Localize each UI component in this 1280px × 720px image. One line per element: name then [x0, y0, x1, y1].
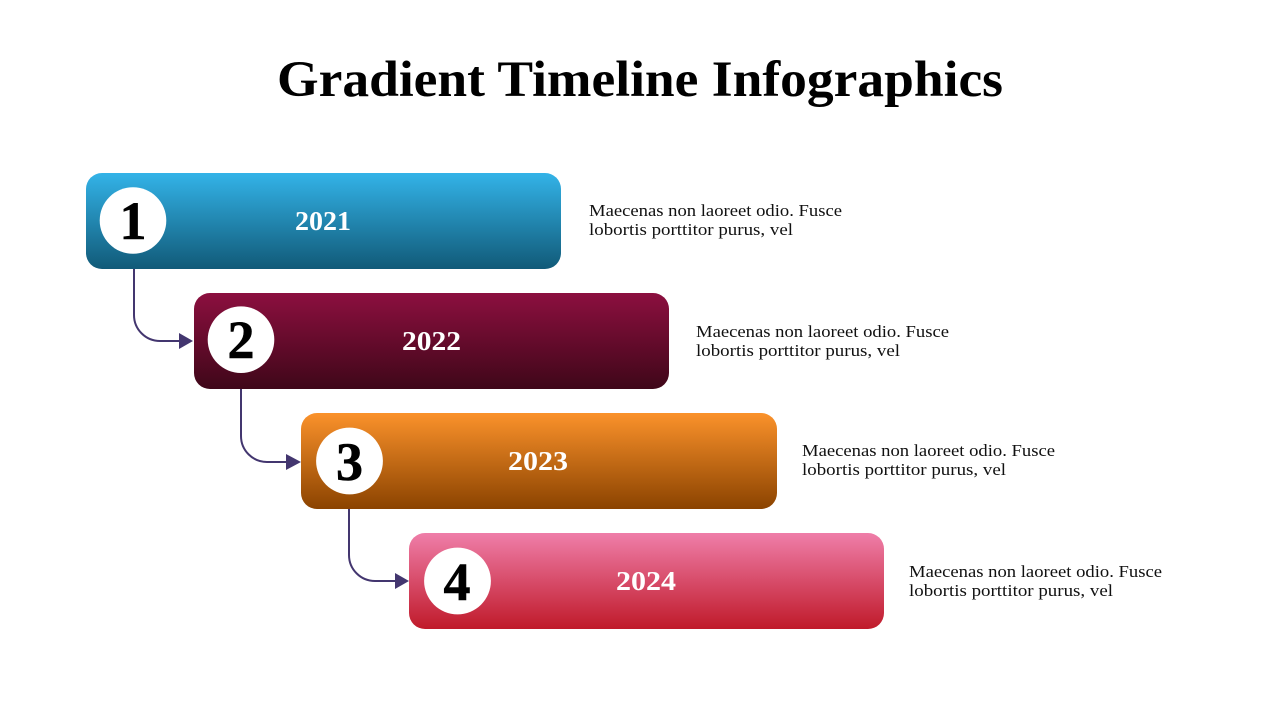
description: 2023: Maecenas non laoreet odio. Fusce [802, 441, 1055, 460]
year label: 2022: 2022 [402, 326, 461, 356]
arrow: step 2 to step 3 [241, 389, 301, 470]
arrow: step 1 to step 2 [134, 269, 193, 349]
bar: 2022 [194, 293, 669, 389]
year label: 2021: 2021 [295, 206, 351, 236]
year label: 2024: 2024 [616, 566, 676, 596]
badge: number 3 [316, 428, 383, 494]
description: 2021: lobortis porttitor purus, vel [589, 220, 793, 239]
title: Gradient Timeline Infographics [277, 52, 1003, 108]
year label: 2023: 2023 [508, 446, 568, 476]
panel: 2022 step [194, 293, 669, 389]
panel: 2023 step [301, 413, 777, 509]
description: 2022: Maecenas non laoreet odio. Fusce [696, 322, 949, 341]
description: 2024: lobortis porttitor purus, vel [909, 581, 1113, 600]
panel: 2021 step [86, 173, 561, 269]
badge: number 1 [100, 187, 166, 254]
badge: number 2 [208, 306, 274, 373]
description: 2023: lobortis porttitor purus, vel [802, 460, 1006, 479]
bar: 2024 [409, 533, 884, 629]
badge: number 2: 2 [228, 310, 254, 370]
badge: number 4: 4 [444, 552, 470, 612]
description: 2021: Maecenas non laoreet odio. Fusce [589, 201, 842, 220]
description: 2024: Maecenas non laoreet odio. Fusce [909, 562, 1162, 581]
panel: 2024 step [409, 533, 884, 629]
description: 2022: lobortis porttitor purus, vel [696, 341, 900, 360]
badge: number 3: 3 [336, 432, 363, 492]
arrow: step 3 to step 4 [349, 509, 409, 589]
badge: number 1: 1 [120, 191, 146, 251]
bar: 2023 [301, 413, 777, 509]
bar: 2021 [86, 173, 561, 269]
badge: number 4 [424, 548, 491, 614]
